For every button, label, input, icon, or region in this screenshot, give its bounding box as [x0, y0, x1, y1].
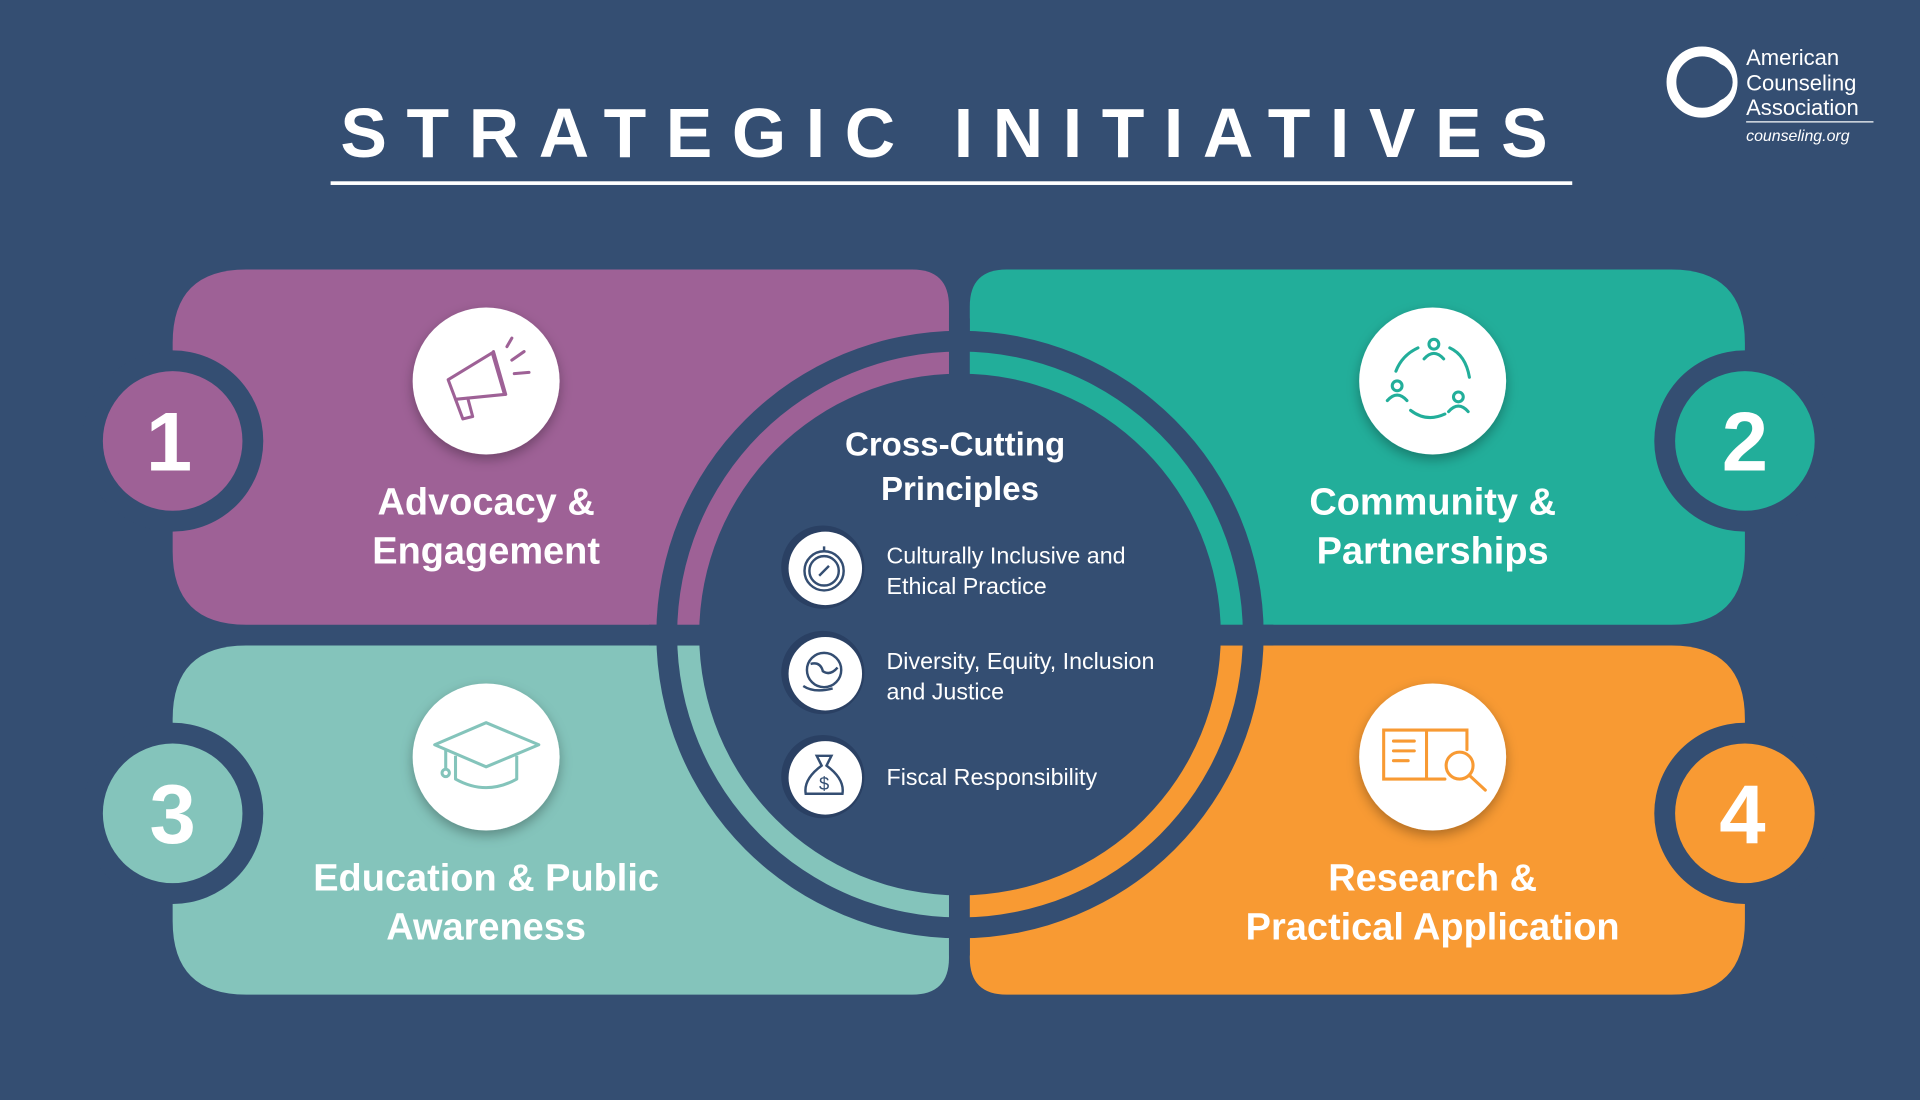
- number 2: 2: [1722, 395, 1768, 488]
- label: research: [1246, 858, 1620, 949]
- heading: cross-cutting: [845, 427, 1065, 508]
- panel: education: [173, 646, 949, 995]
- number 3: [82, 723, 263, 904]
- label: education: Education & Public: [313, 858, 659, 900]
- principle 1: Culturally Inclusive and: [887, 542, 1126, 568]
- principle 3: [781, 735, 1097, 818]
- logo: [1671, 45, 1873, 145]
- principle 3: $: [819, 773, 829, 794]
- label: education: [313, 858, 659, 949]
- number 4: 4: [1719, 768, 1766, 861]
- icon: graduation cap: [413, 684, 560, 831]
- logo: American: [1746, 45, 1839, 70]
- label: advocacy: [372, 481, 600, 572]
- panel: research: [970, 646, 1745, 995]
- number 2: [1654, 350, 1836, 532]
- principle 2: Diversity, Equity, Inclusion: [887, 648, 1154, 674]
- heading: cross-cutting: Cross-Cutting: [845, 427, 1065, 464]
- icon: community cycle: [1359, 307, 1506, 454]
- label: community: Partnerships: [1317, 530, 1549, 572]
- heading: cross-cutting: Principles: [881, 471, 1039, 508]
- panel: community: [970, 269, 1745, 625]
- principle 1: Ethical Practice: [887, 573, 1047, 599]
- number 3: 3: [150, 768, 196, 861]
- label: advocacy: Engagement: [372, 530, 600, 572]
- principle 1: [781, 526, 1126, 609]
- label: advocacy: Advocacy &: [378, 481, 595, 523]
- label: education: Awareness: [386, 907, 586, 949]
- label: research: Research &: [1328, 858, 1537, 900]
- principle 2: and Justice: [887, 678, 1004, 704]
- label: community: Community &: [1309, 481, 1556, 523]
- number 1: 1: [146, 395, 192, 488]
- number 1: [82, 350, 263, 532]
- icon: book and magnifier: [1359, 684, 1506, 831]
- logo: Counseling: [1746, 71, 1856, 96]
- logo: counseling.org: [1746, 128, 1850, 145]
- center circle: [649, 318, 1273, 955]
- title: STRATEGIC INITIATIVES: [340, 94, 1567, 172]
- principle 3: Fiscal Responsibility: [887, 764, 1097, 790]
- number 4: [1654, 723, 1836, 904]
- icon: megaphone: [413, 307, 560, 454]
- panel: advocacy: [173, 269, 949, 625]
- label: research: Practical Application: [1246, 907, 1620, 949]
- logo: Association: [1746, 95, 1859, 120]
- principle 2: [781, 631, 1154, 714]
- label: community: [1309, 481, 1556, 572]
